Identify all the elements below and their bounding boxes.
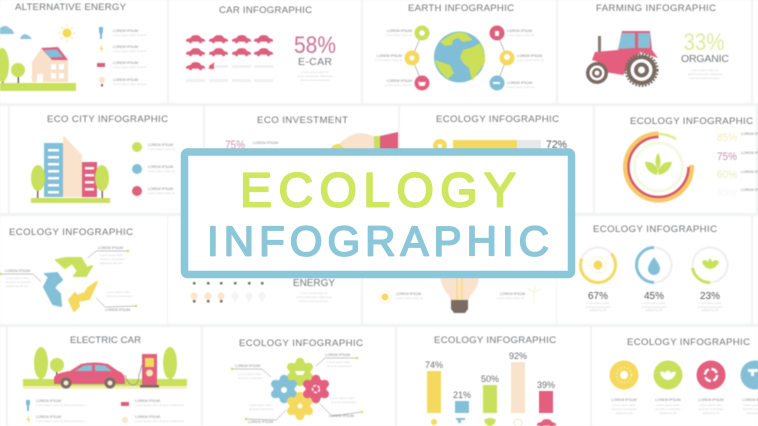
list: numbered items: Lorem ipsum dolor sit <box>148 147 175 151</box>
list: car features: LOREM IPSUM <box>135 415 160 419</box>
labels: bulb callouts: Lorem ipsum dolor sit <box>396 296 423 300</box>
callouts: recycle labels: LOREM IPSUM <box>98 246 123 250</box>
callouts: gear labels <box>231 353 363 424</box>
stat: energy label: Lorem ipsum dolor sit <box>301 291 328 295</box>
progress bar: 72 percent: 72% <box>546 139 567 151</box>
icon: recycle circle <box>696 360 726 390</box>
stat: 58 percent e-car: Lorem ipsum dolor sit <box>302 70 329 74</box>
linked icons around globe: LOREM IPSUM <box>387 79 412 83</box>
callouts: gear labels: sit amet consectetur <box>331 400 356 404</box>
donut: 23 percent leaf <box>692 248 728 312</box>
donut: 67 percent sun <box>573 240 623 312</box>
heading: ecology infographic: ECOLOGY INFOGRAPHIC <box>593 224 717 235</box>
panel: eco city infographic <box>10 106 203 213</box>
heading: car infographic: CAR INFOGRAPHIC <box>219 5 312 16</box>
icon: sun circle <box>610 360 638 390</box>
panel: earth infographic <box>363 0 556 103</box>
donut: 45 percent water: adipiscing elit <box>646 308 663 312</box>
stat: energy label: ENERGY <box>293 278 335 289</box>
donut: 23 percent leaf: sit amet consectetur <box>697 305 723 309</box>
callouts: recycle labels: adipiscing elit sed <box>100 261 123 265</box>
list: numbered items: LOREM IPSUM <box>148 143 173 147</box>
title: ecology: ECOLOGY <box>240 164 516 218</box>
labels: circle icon text: adipiscing elit <box>703 411 720 415</box>
linked icons around globe: LOREM IPSUM <box>507 29 532 33</box>
linked icons around globe: Lorem ipsum dolor sit <box>507 33 534 37</box>
icon: globe <box>434 32 485 82</box>
stat: 33 percent organic: amet consectetur adipiscing <box>688 72 723 76</box>
callouts: gear labels: sit amet consectetur <box>327 364 352 368</box>
donut: 45 percent water: sit amet consectetur <box>641 305 667 309</box>
labels: circle icon text <box>611 398 758 415</box>
panel: energy infographic <box>168 216 361 324</box>
icon: wind turbine <box>528 286 541 304</box>
heading: ecology infographic: ECOLOGY INFOGRAPHIC <box>627 337 750 348</box>
chart: concentric ring <box>626 134 692 200</box>
list: energy items: Lorem ipsum dolor sit amet <box>113 65 147 69</box>
callouts: recycle labels: sit amet consectetur <box>107 294 132 298</box>
callouts: gear labels: sit amet consectetur <box>238 376 263 380</box>
panel: ecology donuts <box>557 216 751 324</box>
heading: alternative energy: ALTERNATIVE ENERGY <box>15 2 127 13</box>
panel: car infographic <box>169 0 361 103</box>
icon: recycle arrows <box>44 258 97 311</box>
illustration: car charging scene <box>23 347 187 389</box>
stat: 58 percent e-car: 58% <box>294 32 336 59</box>
stat: energy label: amet consectetur adipiscing <box>297 295 332 299</box>
linked icons around globe: LOREM IPSUM <box>387 29 412 33</box>
legend: percent list <box>717 132 758 199</box>
callouts: recycle labels: Lorem ipsum dolor <box>100 253 123 257</box>
chart: percentage bars <box>425 351 556 413</box>
linked icons around globe: Lorem ipsum dolor sit <box>517 58 544 62</box>
list: energy items: LOREM IPSUM <box>113 61 138 65</box>
icon: leaves <box>645 153 672 175</box>
linked icons around globe <box>375 26 544 90</box>
panel: cropped far left row four <box>0 327 6 426</box>
chart: percentage bars: 74% <box>425 360 444 371</box>
legend: percent list: 85% <box>717 132 737 144</box>
callouts: recycle labels: sit amet consectetur <box>6 280 31 284</box>
callouts: recycle labels: adipiscing elit sed <box>6 284 29 288</box>
list: energy items: Lorem ipsum dolor sit amet <box>113 33 147 37</box>
chart: percentage bars: 39% <box>537 380 556 391</box>
stat: 58 percent e-car: sed do eiusmod tempor <box>300 78 330 82</box>
pictogram: light bulbs <box>190 282 266 302</box>
heading: ecology infographic: ECOLOGY INFOGRAPHIC <box>630 116 753 127</box>
panel: circle icons infographic <box>592 327 758 426</box>
linked icons around globe: LOREM IPSUM <box>517 54 542 58</box>
stat: energy label <box>293 278 335 303</box>
icon: clouds <box>0 26 32 39</box>
callouts: gear labels: Lorem ipsum dolor <box>249 403 272 407</box>
donut: 23 percent leaf: 23% <box>700 291 720 302</box>
linked icons around globe: Lorem ipsum dolor sit <box>375 58 402 62</box>
callouts: gear labels: sit amet consectetur <box>249 407 274 411</box>
label: lorem ipsum: LOREM IPSUM <box>253 141 278 145</box>
panel: electric car <box>8 327 201 426</box>
list: numbered items: Lorem ipsum dolor sit <box>148 191 175 195</box>
linked icons around globe: Lorem ipsum dolor sit <box>507 85 534 89</box>
callouts: recycle labels: LOREM IPSUM <box>105 308 130 312</box>
linked icons around globe: LOREM IPSUM <box>377 54 402 58</box>
callouts: gear labels: LOREM IPSUM <box>235 364 260 368</box>
stat: 33 percent organic <box>681 29 729 80</box>
labels: circle icon text: LOREM IPSUM <box>698 398 724 402</box>
labels: circle icon text: Lorem ipsum dolor <box>699 403 723 407</box>
donut: 67 percent sun: sit amet consectetur <box>585 305 611 309</box>
stat: energy label: sed do eiusmod tempor <box>299 299 329 303</box>
callouts: gear labels: Lorem ipsum dolor <box>331 396 354 400</box>
stat: 58 percent e-car: amet consectetur adipiscing <box>298 74 333 78</box>
panel: alternative energy <box>0 0 167 103</box>
illustration: large bulb <box>440 278 479 313</box>
list: car features: Lorem ipsum dolor sit amet consectetur <box>36 419 85 423</box>
illustration: trees and ground <box>0 48 76 91</box>
callouts: recycle labels: Lorem ipsum dolor <box>107 290 130 294</box>
illustration: house with solar roof <box>32 47 68 82</box>
labels: circle icon text: LOREM IPSUM <box>611 398 637 402</box>
labels: bulb callouts <box>396 292 525 300</box>
heading: ecology infographic: ECOLOGY INFOGRAPHIC <box>9 227 133 238</box>
stat: 33 percent organic: sed do eiusmod tempor <box>690 76 720 80</box>
linked icons around globe: LOREM IPSUM <box>507 81 532 85</box>
donut: 23 percent leaf: Lorem ipsum dolor <box>698 301 722 305</box>
donut: 67 percent sun: 67% <box>588 291 608 302</box>
list: energy items: LOREM IPSUM <box>113 29 138 33</box>
labels: circle icon text: sit amet consectetur <box>655 407 681 411</box>
donut: 23 percent leaf: adipiscing elit <box>702 308 719 312</box>
labels: bulb callouts: Lorem ipsum dolor sit <box>497 296 524 300</box>
icon: four gears <box>271 358 329 420</box>
donut: 45 percent water: 45% <box>644 291 664 302</box>
labels: circle icon text: LOREM IPSUM <box>655 398 681 402</box>
callouts: gear labels: LOREM IPSUM <box>329 414 354 418</box>
labels: bulb callouts: LOREM IPSUM <box>500 292 525 296</box>
chart: percentage bars: 92% <box>509 351 528 362</box>
central title panel <box>184 152 572 274</box>
callouts: recycle labels <box>0 246 137 312</box>
panel: light bulb infographic <box>363 216 556 324</box>
heading: electric car: ELECTRIC CAR <box>70 335 141 346</box>
callouts: gear labels: Lorem ipsum dolor <box>238 372 261 376</box>
panel: cropped far right row three <box>753 216 758 324</box>
stat: 33 percent organic: 33% <box>684 29 724 56</box>
labels: circle icon text: sit amet consectetur <box>698 407 724 411</box>
panel: ecology ring chart <box>595 106 758 213</box>
labels: circle icon text: Lorem ipsum dolor <box>656 403 680 407</box>
labels: circle icon text: adipiscing elit <box>616 411 633 415</box>
list: car features: LOREM IPSUM <box>36 415 61 419</box>
heading: ecology infographic: ECOLOGY INFOGRAPHIC <box>239 338 363 349</box>
illustration: city buildings <box>31 135 110 203</box>
list: car features: Lorem ipsum dolor sit amet consectetur <box>135 419 184 423</box>
panel: ecology progress bars <box>400 106 593 213</box>
callouts: recycle labels: sit amet consectetur <box>100 257 125 261</box>
donut: 67 percent sun: Lorem ipsum dolor <box>586 301 610 305</box>
callouts: gear labels: LOREM IPSUM <box>325 353 350 357</box>
panel: bar chart infographic <box>397 327 590 426</box>
callouts: recycle labels: Lorem ipsum dolor <box>6 276 29 280</box>
list: car features: LOREM IPSUM <box>36 399 61 403</box>
list: numbered items: Lorem ipsum dolor sit <box>148 169 175 173</box>
title: infographic: INFOGRAPHIC <box>207 218 549 264</box>
linked icons around globe: Lorem ipsum dolor sit <box>385 33 412 37</box>
illustration: tractor <box>586 31 658 86</box>
progress bar: 72 percent <box>433 139 567 153</box>
list: car features: Lorem ipsum dolor sit amet consectetur <box>36 403 85 407</box>
heading: farming infographic: FARMING INFOGRAPHIC <box>596 3 716 14</box>
stat: 58 percent e-car: E-CAR <box>298 56 332 68</box>
icons: bar categories <box>431 418 556 426</box>
callouts: recycle labels: LOREM IPSUM <box>5 269 30 273</box>
callouts: gear labels: LOREM IPSUM <box>248 420 273 424</box>
labels: circle icon text: adipiscing elit <box>660 411 677 415</box>
panel: farming infographic <box>558 0 751 103</box>
list: energy items: LOREM IPSUM <box>113 78 138 82</box>
stat: 75 percent: 75% <box>225 138 245 152</box>
icon: leaf circle <box>654 360 682 390</box>
heading: ecology infographic: ECOLOGY INFOGRAPHIC <box>436 114 559 125</box>
list: energy items: Lorem ipsum dolor sit amet <box>113 82 147 86</box>
panel: cropped far right top <box>753 0 758 103</box>
labels: circle icon text: Lorem ipsum dolor <box>612 403 636 407</box>
chart: percentage bars: 21% <box>453 390 472 401</box>
chart: percentage bars: 50% <box>481 374 500 385</box>
icon: sun <box>379 291 391 303</box>
stat: 58 percent e-car <box>294 32 336 82</box>
list: numbered items <box>132 142 175 196</box>
donut: 67 percent sun: adipiscing elit <box>590 308 607 312</box>
labels: bulb callouts: LOREM IPSUM <box>396 292 421 296</box>
icon: sun <box>58 24 76 42</box>
list: numbered items: LOREM IPSUM <box>148 187 173 191</box>
heading: eco city: ECO CITY INFOGRAPHIC <box>47 114 168 125</box>
stat: 33 percent organic: ORGANIC <box>681 53 729 65</box>
callouts: gear labels: Lorem ipsum dolor <box>327 360 350 364</box>
linked icons around globe: Lorem ipsum dolor sit <box>385 83 412 87</box>
heading: eco investment: ECO INVESTMENT <box>257 115 348 126</box>
legend: percent list: 45% <box>717 187 737 199</box>
donut: 45 percent water <box>636 248 672 312</box>
panel: recycle infographic <box>0 216 167 324</box>
list: energy items <box>97 27 147 86</box>
panel: gears infographic <box>203 327 395 426</box>
icon: tap circle <box>740 360 758 390</box>
legend: percent list: 75% <box>717 151 737 163</box>
list: numbered items: LOREM IPSUM <box>148 165 173 169</box>
panel: cropped far left row two <box>0 106 8 213</box>
stat: 33 percent organic: Lorem ipsum dolor sit <box>692 68 719 72</box>
labels: circle icon text: sit amet consectetur <box>611 407 637 411</box>
heading: earth infographic: EARTH INFOGRAPHIC <box>408 3 514 14</box>
list: car features <box>26 399 184 424</box>
illustration: hand and chart bars <box>330 132 398 150</box>
list: car features: LOREM IPSUM <box>135 399 160 403</box>
list: car features: Lorem ipsum dolor sit amet consectetur <box>135 403 184 407</box>
list: energy items: LOREM IPSUM <box>113 45 138 49</box>
legend: percent list: 60% <box>717 169 737 181</box>
donut: 45 percent water: Lorem ipsum dolor <box>642 301 666 305</box>
panel: eco investment <box>205 106 398 213</box>
heading: ecology infographic: ECOLOGY INFOGRAPHIC <box>434 335 556 346</box>
list: energy items: Lorem ipsum dolor sit amet <box>113 49 147 53</box>
pictogram: cars 58 percent <box>186 35 273 82</box>
